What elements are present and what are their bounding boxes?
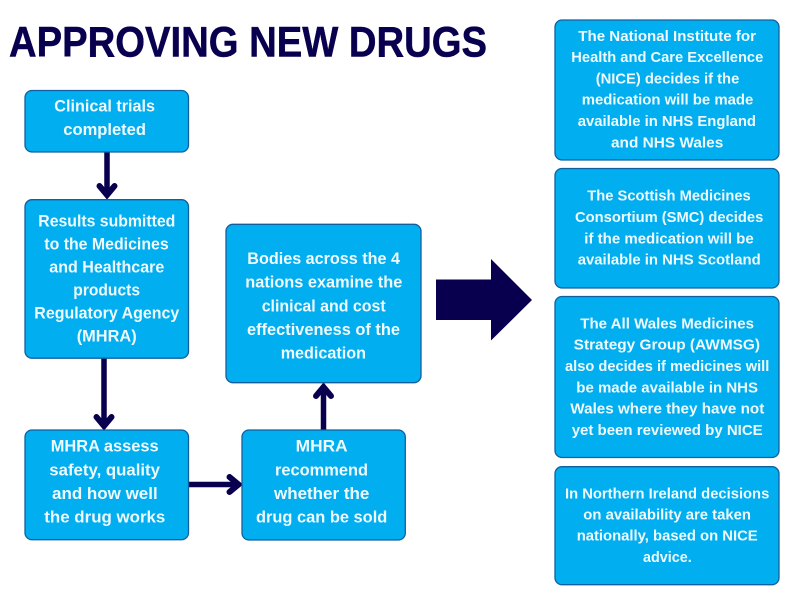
- box: MHRA recommend: [242, 430, 405, 540]
- panel: NICE: and NHS Wales: [611, 134, 723, 151]
- panel: SMC: Consortium (SMC) decides: [575, 209, 763, 226]
- box: MHRA recommend: drug can be sold: [256, 509, 387, 527]
- panel: AWMSG: be made available in NHS: [576, 379, 758, 396]
- panel: NICE: medication will be made: [582, 92, 753, 109]
- box: clinical trials completed: [25, 90, 188, 152]
- panel: AWMSG: The All Wales Medicines: [580, 315, 754, 332]
- panel: NICE: The National Institute for: [578, 28, 756, 45]
- panel: NICE: Health and Care Excellence: [571, 49, 763, 66]
- panel: AWMSG: Wales where they have not: [570, 401, 764, 418]
- box: bodies across the 4 nations: clinical and cost: [262, 297, 386, 315]
- arrow: trials to results: [100, 152, 114, 196]
- box: bodies across the 4 nations: nations examine the: [245, 274, 402, 292]
- arrow: results to assess: [96, 358, 112, 427]
- box: MHRA assess: MHRA assess: [51, 438, 159, 456]
- panel: Northern Ireland: nationally, based on NICE: [577, 528, 758, 545]
- panel: NICE: [555, 20, 779, 160]
- title: APPROVING NEW DRUGS: [9, 19, 487, 67]
- box: results submitted: to the Medicines: [44, 236, 169, 254]
- box: MHRA assess: safety, quality: [49, 461, 161, 479]
- box: results submitted: and Healthcare: [49, 259, 164, 277]
- box: results submitted: products: [73, 282, 140, 300]
- arrow: recommend to bodies: [316, 386, 331, 430]
- panel: Northern Ireland: advice.: [643, 549, 692, 566]
- box: results submitted: [25, 200, 188, 358]
- box: results submitted: Results submitted: [38, 213, 175, 231]
- box: MHRA recommend: whether the: [273, 485, 369, 503]
- box: MHRA assess: the drug works: [44, 509, 165, 527]
- panel: AWMSG: [555, 296, 779, 458]
- box: results submitted: (MHRA): [77, 328, 137, 346]
- panel: SMC: available in NHS Scotland: [578, 252, 761, 269]
- box: clinical trials completed: completed: [63, 121, 146, 139]
- box: results submitted: Regulatory Agency: [34, 305, 180, 323]
- panel: Northern Ireland: In Northern Ireland decisions: [565, 485, 769, 502]
- box: bodies across the 4 nations: Bodies across the 4: [247, 250, 401, 268]
- panel: SMC: if the medication will be: [584, 230, 754, 247]
- arrow: assess to recommend: [188, 477, 239, 492]
- box: MHRA recommend: MHRA: [296, 438, 348, 456]
- box: MHRA assess: [25, 430, 188, 540]
- panel: SMC: The Scottish Medicines: [587, 188, 751, 205]
- box: MHRA recommend: recommend: [275, 461, 368, 479]
- panel: NICE: (NICE) decides if the: [596, 70, 739, 87]
- box: bodies across the 4 nations: medication: [281, 345, 366, 363]
- box: clinical trials completed: Clinical trials: [54, 98, 155, 116]
- box: bodies across the 4 nations: effectiveness of the: [247, 321, 400, 339]
- panel: Northern Ireland: [555, 467, 779, 585]
- box: MHRA assess: and how well: [52, 485, 158, 503]
- box: bodies across the 4 nations: [226, 224, 421, 383]
- big arrow: [436, 259, 532, 340]
- panel: SMC: [555, 168, 779, 288]
- panel: AWMSG: Strategy Group (AWMSG): [574, 337, 760, 354]
- panel: AWMSG: also decides if medicines will: [565, 358, 769, 375]
- panel: AWMSG: yet been reviewed by NICE: [572, 422, 763, 439]
- panel: NICE: available in NHS England: [578, 113, 756, 130]
- panel: Northern Ireland: on availability are taken: [583, 507, 751, 524]
